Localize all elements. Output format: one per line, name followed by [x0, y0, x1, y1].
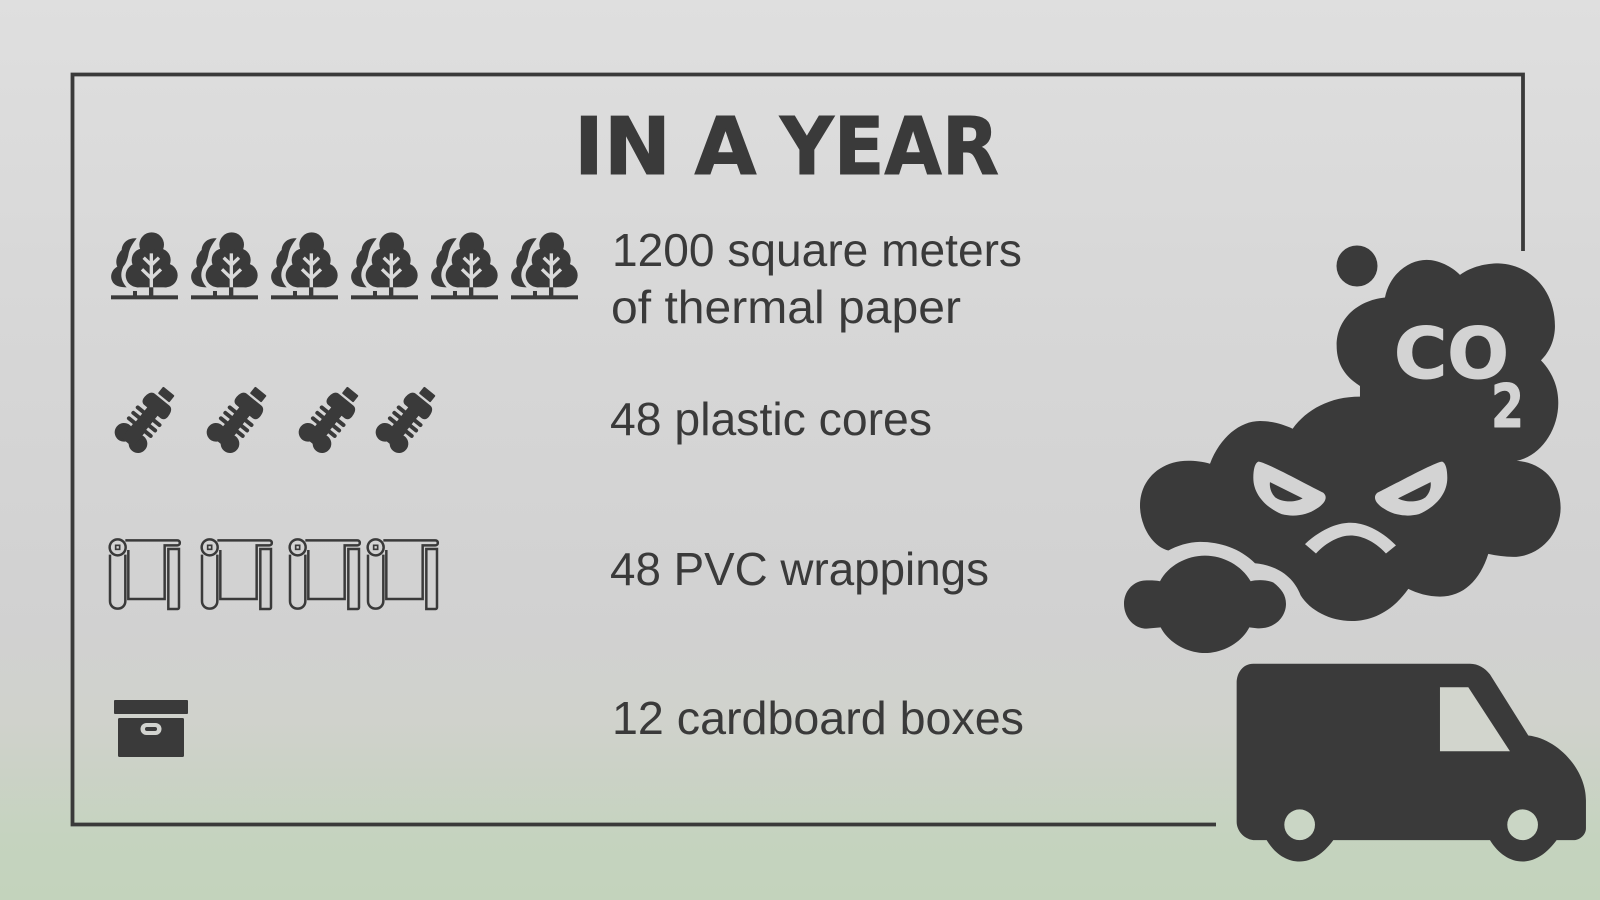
icons: four plastic bottles — [111, 380, 444, 457]
text: PVC wrappings: 48 PVC wrappings — [610, 543, 989, 595]
text: thermal paper — [611, 224, 1022, 333]
text: plastic cores: 48 plastic cores — [610, 393, 932, 445]
icon: delivery van — [1237, 664, 1586, 862]
icon: bottle 2 — [203, 380, 275, 457]
text: cardboard boxes: 12 cardboard boxes — [612, 692, 1024, 744]
icon: tree 2 — [191, 232, 258, 299]
icon: tree 6 — [511, 232, 578, 299]
illustration: pollution cloud and van — [1124, 246, 1586, 862]
icon: roll 3 — [290, 539, 360, 609]
title: YEAR — [779, 101, 999, 193]
icon: bottle 3 — [295, 380, 367, 457]
title: A — [694, 101, 756, 193]
icon: angry CO2 cloud: CO — [1394, 313, 1509, 395]
icon: roll 1 — [110, 539, 180, 609]
text: thermal paper: of thermal paper — [611, 281, 961, 333]
icons: four PVC wrapping rolls — [110, 539, 438, 609]
icon: roll 4 — [368, 539, 438, 609]
icon: small smoke ball — [1336, 246, 1378, 286]
icon: bottle 4 — [372, 380, 444, 457]
icon: tree 1 — [111, 232, 178, 299]
icon: angry CO2 cloud: 2 — [1491, 372, 1524, 442]
icons: six trees — [111, 232, 578, 299]
icon: tree 4 — [351, 232, 418, 299]
icon: bottle 1 — [111, 380, 183, 457]
frame outline — [72, 74, 1523, 824]
text: thermal paper: 1200 square meters — [612, 224, 1022, 276]
title: IN — [574, 101, 671, 193]
icon: tree 5 — [431, 232, 498, 299]
icon: angry CO2 cloud — [1140, 260, 1561, 621]
icon: small cloud — [1124, 556, 1286, 653]
title — [574, 101, 999, 193]
icon: roll 2 — [202, 539, 272, 609]
icon: tree 3 — [271, 232, 338, 299]
icon: cardboard box — [114, 700, 188, 757]
